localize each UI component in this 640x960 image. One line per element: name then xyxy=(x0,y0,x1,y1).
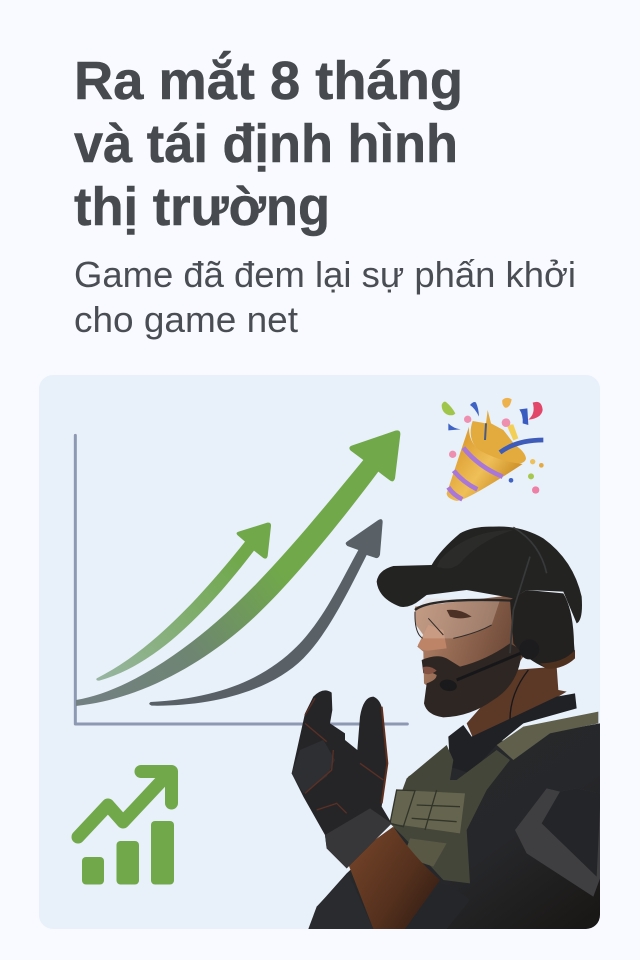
cap top shade xyxy=(437,530,513,569)
chart axes xyxy=(75,435,407,724)
popper interior xyxy=(471,410,526,464)
glasses xyxy=(415,598,513,638)
title: và tái định hình xyxy=(74,114,458,174)
popper cone xyxy=(447,427,523,501)
neck xyxy=(466,668,566,736)
title: Ra mắt 8 tháng xyxy=(74,51,463,111)
headset microphone xyxy=(440,650,530,691)
vest shoulder strap xyxy=(497,712,598,760)
shoulder patch xyxy=(515,788,601,897)
title: thị trường xyxy=(74,177,330,237)
vest pouches xyxy=(390,790,465,867)
sleeve cuff xyxy=(405,883,470,929)
eye shadow xyxy=(447,610,472,618)
cable xyxy=(510,670,528,720)
character: soldier xyxy=(292,526,601,930)
icon: party popper xyxy=(442,398,544,501)
chart: axes with three rising arrows xyxy=(75,430,407,724)
vest xyxy=(390,745,510,883)
nose xyxy=(418,625,447,651)
icon bars xyxy=(82,821,174,884)
jacket xyxy=(308,723,600,930)
thumb edge xyxy=(382,707,387,803)
ear cup lower glow xyxy=(540,650,575,669)
beard xyxy=(422,643,522,717)
hand glove xyxy=(292,690,392,868)
left sleeve xyxy=(308,894,374,929)
lips xyxy=(423,667,437,674)
icon: growth chart xyxy=(78,772,174,884)
glove palm highlight xyxy=(292,740,335,793)
glove red stitching xyxy=(305,698,383,813)
icon trend arrow xyxy=(78,772,172,837)
subtitle xyxy=(74,254,576,340)
face xyxy=(415,596,523,686)
cap xyxy=(377,526,582,623)
title xyxy=(74,51,463,237)
collar xyxy=(448,693,577,751)
arrow: dark grey xyxy=(149,519,383,706)
popper stripes xyxy=(448,448,503,499)
forearm xyxy=(347,827,440,929)
subtitle: cho game net xyxy=(74,299,298,340)
headset band xyxy=(510,527,547,653)
glove wrist strap xyxy=(325,808,392,868)
confetti xyxy=(442,398,544,494)
subtitle: Game đã đem lại sự phấn khởi xyxy=(74,254,576,295)
arrow: small green xyxy=(96,523,271,681)
ear cup xyxy=(510,590,575,668)
arrow: large green xyxy=(76,430,400,706)
popper streamers xyxy=(500,440,543,452)
panel: illustration xyxy=(39,375,601,930)
